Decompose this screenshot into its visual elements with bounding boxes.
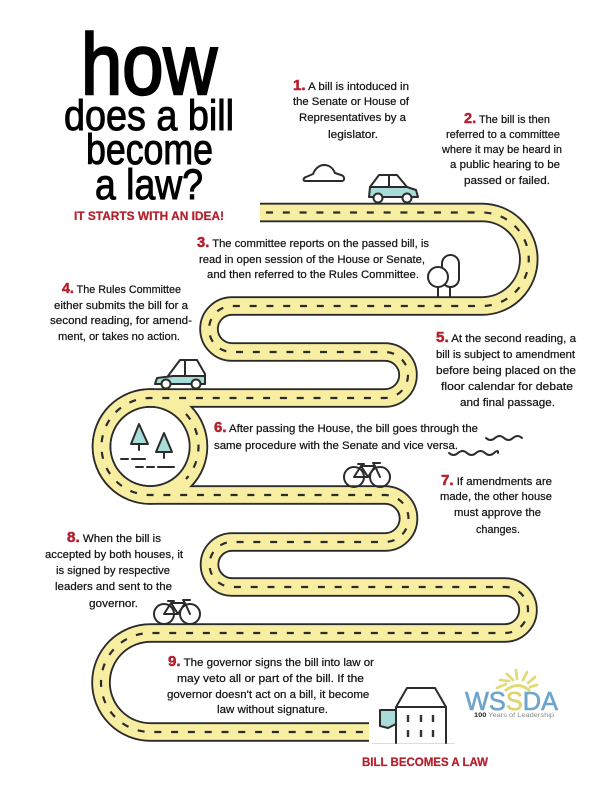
winding road: [101, 212, 529, 732]
title: [64, 17, 234, 209]
step 1 text: the Senate or House of: [293, 96, 410, 108]
step 9 text: 9. The governor signs the bill into law or: [168, 654, 374, 670]
step 7 text: [440, 473, 552, 536]
step 6 text: [214, 420, 478, 452]
step 4 text: [50, 281, 192, 343]
step 3 text: and then referred to the Rules Committee.: [207, 269, 419, 281]
step 8 text: leaders and sent to the: [55, 581, 172, 593]
step 9 text: law without signature.: [217, 704, 328, 716]
step 4 text: either submits the bill for a: [54, 300, 189, 312]
icon: bicycle on lower road: [154, 600, 200, 624]
step 2 text: passed or failed.: [464, 175, 550, 187]
WSSDA logo: [465, 670, 559, 719]
step 7 text: changes.: [476, 524, 520, 536]
step 5 text: bill is subject to amendment: [436, 349, 575, 361]
tagline: IT STARTS WITH AN IDEA!: [74, 209, 224, 223]
step 8 text: accepted by both houses, it: [45, 549, 183, 561]
step 8 text: is signed by respective: [56, 565, 170, 577]
step 9 text: may veto all or part of the bill. If the: [177, 673, 364, 685]
step 7 text: made, the other house: [440, 491, 552, 503]
icon: pine trees in the loop: [121, 424, 174, 467]
step 8 text: [45, 530, 183, 610]
step 2 text: a public hearing to be: [450, 159, 560, 171]
icon: water waves: [449, 436, 522, 455]
step 3 text: 3. The committee reports on the passed bill, is: [197, 235, 430, 251]
step 8 text: 8. When the bill is: [67, 530, 162, 546]
step 1 text: legislator.: [328, 129, 378, 141]
step 8 text: governor.: [89, 598, 138, 610]
WSSDA logo: WSSDA: [465, 686, 559, 716]
step 3 text: read in open session of the House or Senate,: [199, 254, 425, 266]
step 7 text: must approve the: [454, 507, 541, 519]
icon: bicycle on road: [344, 463, 390, 487]
icon: car driving right: [369, 175, 418, 202]
step 3 text: [197, 235, 430, 281]
title: does a bill: [64, 92, 234, 140]
title: how: [81, 17, 218, 113]
step 5 text: [436, 330, 577, 409]
step 5 text: 5. At the second reading, a: [436, 330, 577, 346]
title: become: [86, 126, 213, 174]
icon: cloud: [304, 165, 344, 181]
step 1 text: [293, 78, 410, 141]
step 5 text: floor calendar for debate: [441, 381, 573, 393]
closing label: BILL BECOMES A LAW: [362, 755, 489, 769]
step 9 text: [167, 654, 376, 716]
step 1 text: 1. A bill is intoduced in: [293, 78, 409, 94]
title: a law?: [95, 161, 203, 209]
step 1 text: Representatives by a: [299, 112, 407, 124]
WSSDA logo: 100 Years of Leadership: [474, 712, 554, 719]
step 7 text: 7. If amendments are: [441, 473, 552, 489]
step 5 text: and final passage.: [460, 397, 555, 409]
step 5 text: before being placed on the: [436, 365, 576, 377]
icon: capitol building with flag: [369, 680, 459, 746]
step 2 text: 2. The bill is then: [464, 111, 550, 127]
step 2 text: where it may be heard in: [441, 144, 562, 156]
step 2 text: [441, 111, 562, 187]
step 4 text: 4. The Rules Committee: [62, 281, 181, 297]
icon: trees by the road: [428, 255, 459, 297]
step 4 text: second reading, for amend-: [50, 315, 192, 327]
step 9 text: governor doesn't act on a bill, it becomes: [167, 689, 376, 701]
step 4 text: ment, or takes no action.: [58, 331, 180, 343]
step 6 text: 6. After passing the House, the bill goes through the: [214, 420, 478, 436]
icon: car driving left: [155, 360, 205, 388]
step 2 text: referred to a committee: [446, 129, 560, 141]
step 6 text: same procedure with the Senate and vice versa.: [214, 440, 458, 452]
